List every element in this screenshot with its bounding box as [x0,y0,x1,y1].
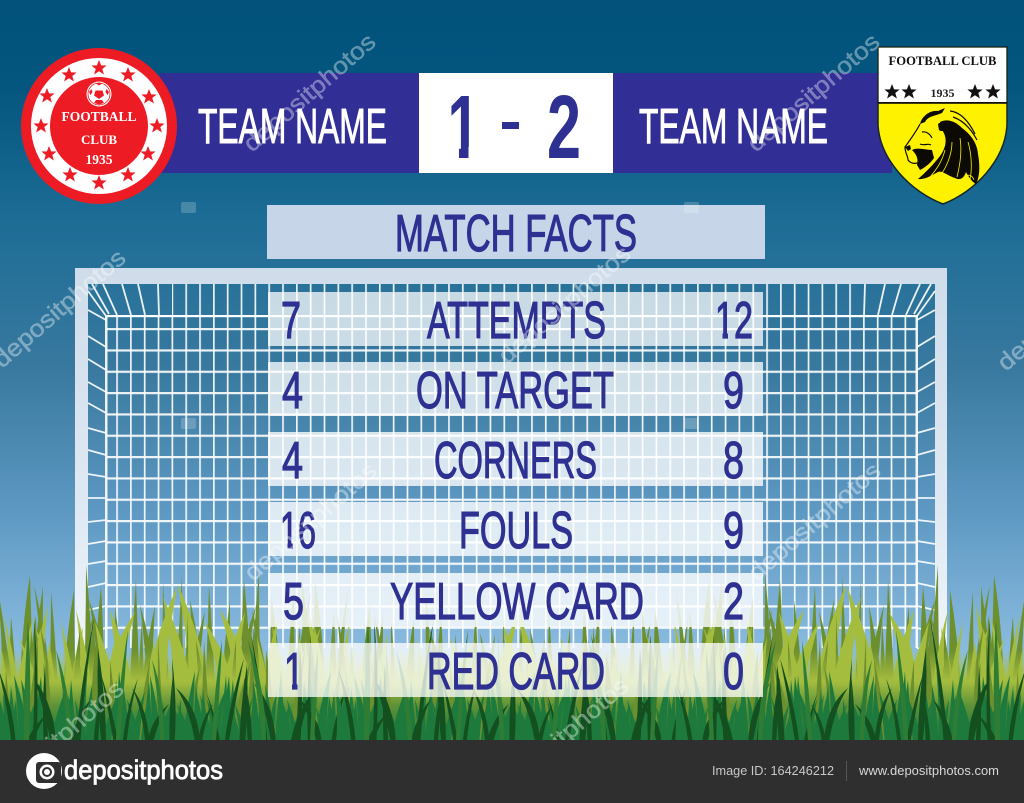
row: on target: ON TARGET [416,362,614,420]
left club badge [21,48,177,204]
badge text [61,109,137,167]
score box: 2 [547,78,581,178]
repeating diagonal watermark: depositphotos [491,672,634,802]
right club shield with lion [878,47,1007,204]
row: yellow card: 2 [723,573,744,631]
score box [419,73,613,178]
right team name: TEAM NAME [639,100,828,154]
stats rows [268,292,763,701]
row: yellow card: 5 [283,573,304,631]
website url: www.depositphotos.com [858,764,999,778]
repeating diagonal watermark: depositphotos [238,28,381,158]
row: red card [268,643,763,701]
repeating diagonal watermark: depositphotos [742,28,885,158]
badge text: CLUB [81,132,117,147]
row: corners: 8 [723,432,744,490]
right club shield with lion: 1935 [930,86,954,100]
image id: Image ID: 164246212 [712,764,834,778]
left team name: TEAM NAME [198,100,387,154]
badge text: 1935 [86,152,113,167]
row: attempts: 7 [281,292,301,350]
row: corners [268,432,763,490]
repeating diagonal watermark: depositphotos [743,457,886,587]
badge text: FOOTBALL [61,109,137,124]
match facts heading: MATCH FACTS [395,205,637,263]
ring of stars [33,60,165,190]
row: on target [268,362,763,420]
row: fouls: 9 [723,502,744,560]
header score bar [160,73,892,178]
repeating diagonal watermark: depositphotos [493,240,636,370]
icon: camera logo [26,753,62,789]
row: fouls: 16 [280,502,316,560]
row: yellow card: YELLOW CARD [390,573,644,631]
row: corners: CORNERS [434,432,597,490]
row: red card: 0 [723,643,744,701]
row: attempts: ATTEMPTS [427,292,606,350]
row: corners: 4 [282,432,303,490]
shield stars [884,84,1001,98]
row: attempts [268,292,763,350]
footer bar [0,740,1024,803]
row: on target: 4 [282,362,303,420]
net grid [88,284,935,652]
repeating diagonal watermark: depositphotos [239,457,382,587]
football icon [86,82,112,106]
lion head [905,108,979,184]
goal posts and crossbar [75,268,947,672]
row: red card: RED CARD [427,643,605,701]
row: fouls: FOULS [459,502,573,560]
row: attempts: 12 [715,292,753,350]
row: fouls [268,502,763,560]
score box: 1 [448,78,480,178]
footer brand name: depositphotos [64,755,223,785]
goal frame and net [75,268,947,672]
shield text: FOOTBALL CLUB [888,54,996,68]
row: on target: 9 [723,362,744,420]
row: red card: 1 [284,643,304,701]
grass foreground [0,565,1024,803]
